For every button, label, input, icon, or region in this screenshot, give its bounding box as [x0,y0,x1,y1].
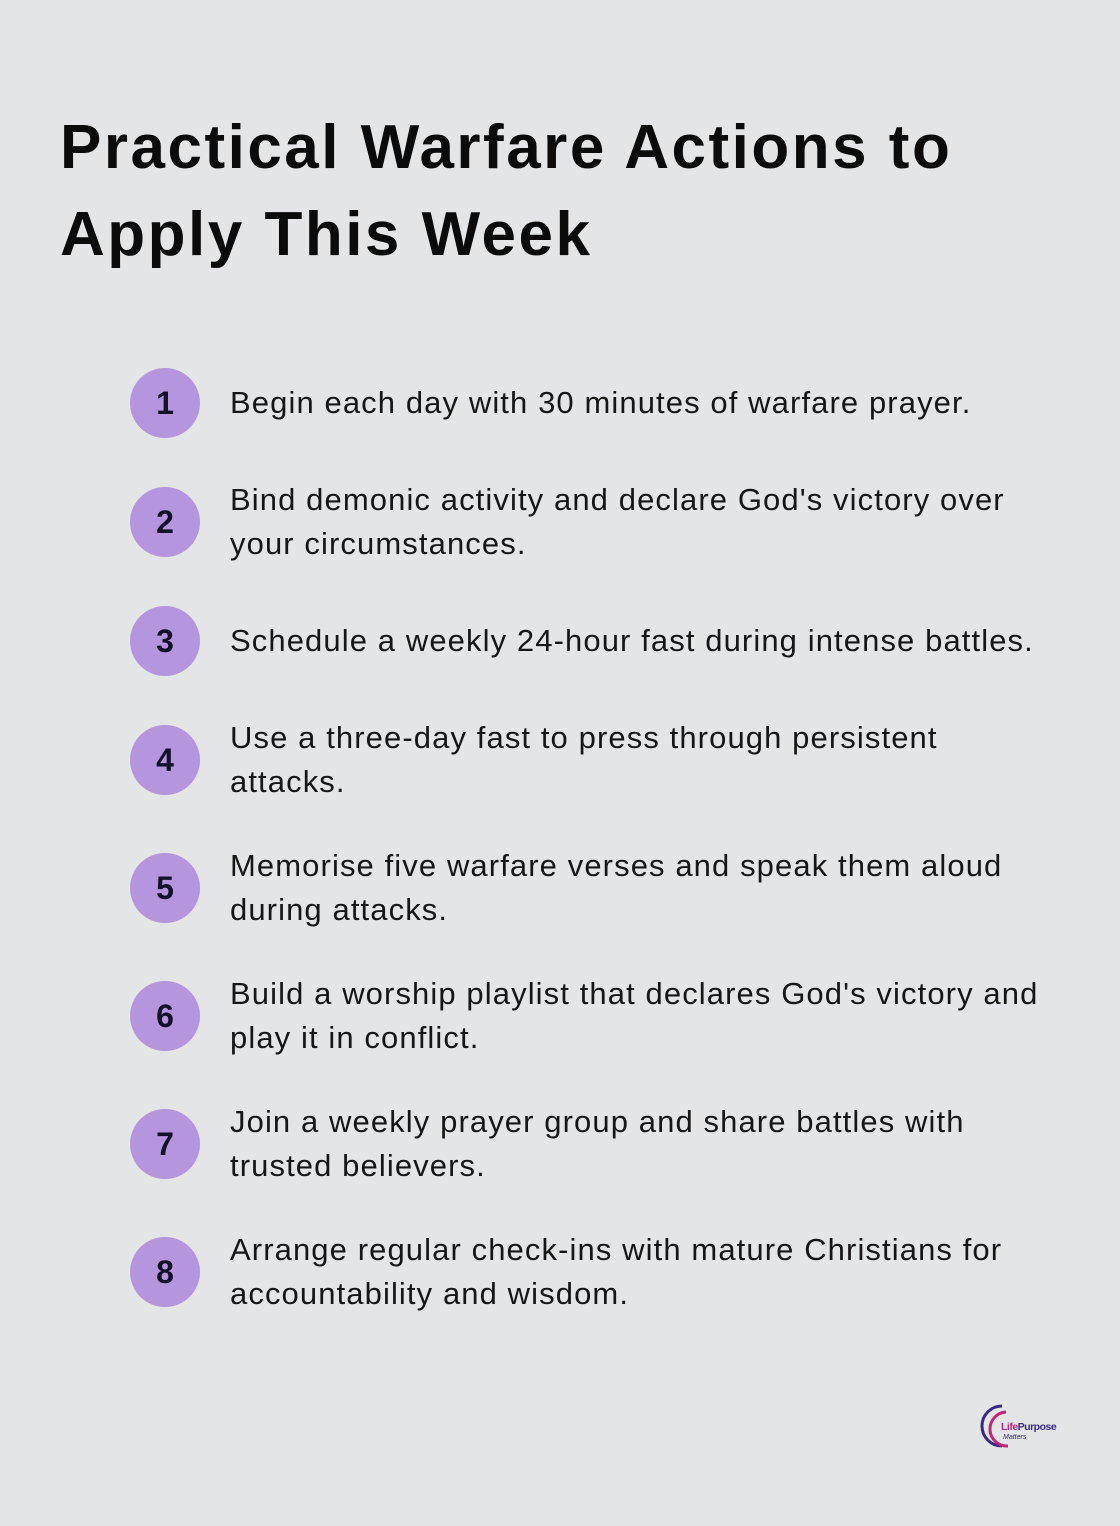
item 4: 4 [156,742,174,778]
logo: Matters [1003,1434,1027,1441]
title [60,113,952,269]
logo: LifePurpose [1001,1421,1057,1433]
text: Memorise five warfare verses and speak them aloud [230,848,1002,883]
text: accountability and wisdom. [230,1276,629,1311]
text: Bind demonic activity and declare God's victory over [230,482,1005,517]
item 1: Begin each day with 30 minutes of warfare prayer. [230,385,971,420]
item 5: 5 [156,870,174,906]
item 3 [130,606,1034,676]
item 2 [130,482,1005,561]
item 2: 2 [156,504,174,540]
text: trusted believers. [230,1148,486,1183]
item 1: 1 [156,385,174,421]
text: Build a worship playlist that declares God's victory and [230,976,1038,1011]
item 1 [130,368,971,438]
text: Arrange regular check-ins with mature Christians for [230,1232,1002,1267]
title: Apply This Week [60,200,592,269]
item 3: 3 [156,623,174,659]
text: during attacks. [230,892,448,927]
text: Join a weekly prayer group and share battles with [230,1104,965,1139]
text: your circumstances. [230,526,527,561]
text: Use a three-day fast to press through persistent [230,720,938,755]
item 3: Schedule a weekly 24-hour fast during intense battles. [230,623,1034,658]
item 8: 8 [156,1254,174,1290]
item 8 [130,1232,1002,1311]
item 6: 6 [156,998,174,1034]
logo [980,1404,1057,1448]
item 7 [130,1104,965,1183]
item 6 [130,976,1038,1055]
text: play it in conflict. [230,1020,479,1055]
item 5 [130,848,1002,927]
title: Practical Warfare Actions to [60,113,952,182]
item 4 [130,720,938,799]
text: attacks. [230,764,346,799]
item 7: 7 [156,1126,174,1162]
